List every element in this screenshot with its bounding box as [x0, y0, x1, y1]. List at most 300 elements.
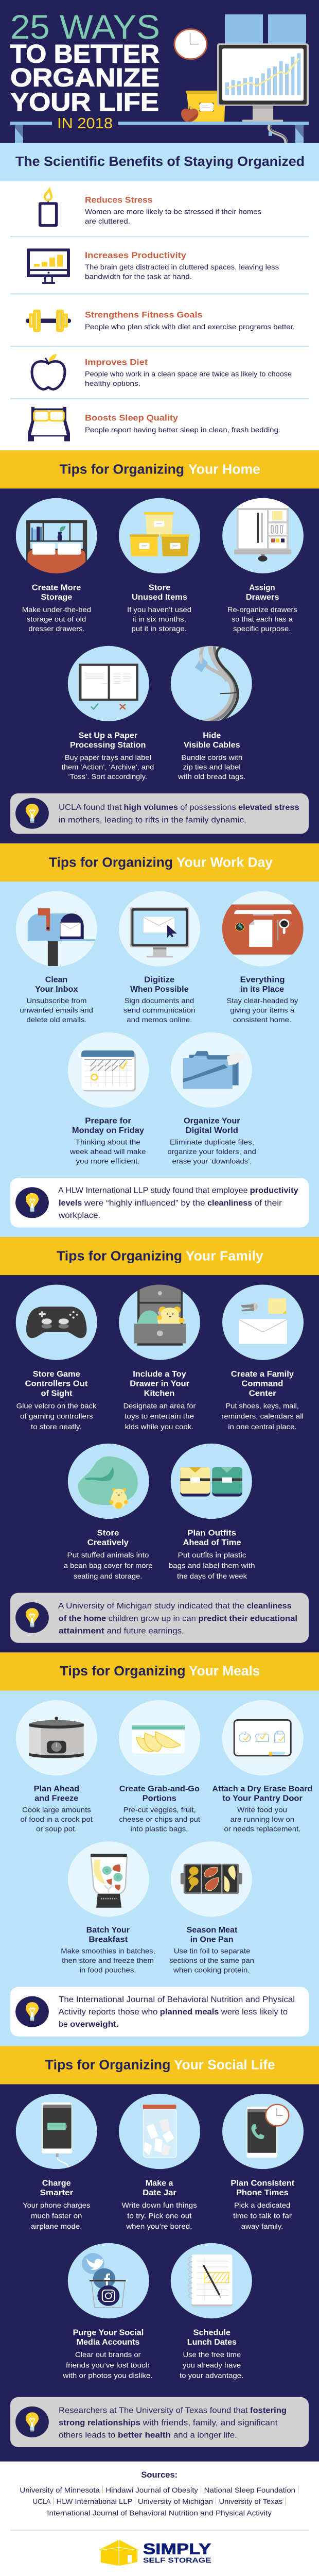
tip text: [119, 1806, 200, 1833]
tip title: Breakfast: [88, 1935, 128, 1944]
tip: charge smarter: [16, 2094, 97, 2231]
tip title: Drawers: [246, 592, 279, 602]
tip text: [167, 1139, 256, 1165]
tip text: [16, 1402, 97, 1431]
callout text: and future earnings.: [107, 1627, 184, 1635]
callout text: of possessions: [180, 804, 236, 812]
tip title: Digital World: [186, 1126, 238, 1135]
tip: batch your breakfast: [61, 1841, 155, 1975]
tip text: delete old emails.: [26, 1016, 86, 1024]
tip text: airplane mode.: [31, 2223, 82, 2231]
tip: grab-and-go portions: [119, 1700, 200, 1833]
tip text: storage out of old: [27, 616, 86, 623]
heading: Tips for Organizing Your Work Day: Your Work Day: [176, 855, 273, 870]
tip: make a date jar: [119, 2094, 200, 2231]
heading: The Scientific Benefits of Staying Organized: [0, 143, 319, 181]
tip title: Create Grab-and-Go: [119, 1784, 200, 1793]
tip title: Center: [249, 1389, 276, 1398]
tip: store creatively: [64, 1444, 153, 1581]
logo: Simply Self Storage: SELF STORAGE: [143, 2557, 211, 2565]
tip text: [169, 1552, 255, 1581]
icon: phone and clock: [222, 2094, 304, 2169]
tip text: organize your folders, and: [167, 1148, 256, 1156]
tip text: sections of the same pan: [169, 1957, 254, 1965]
tip text: erase your ‘downloads’.: [172, 1158, 252, 1165]
tip text: the days of the week: [177, 1572, 247, 1581]
tip text: [169, 1947, 254, 1975]
heading: Tips for Organizing Your Home: [0, 450, 319, 488]
tip text: [69, 1139, 146, 1165]
tip title: [86, 1925, 130, 1944]
tip title: Digitize: [144, 975, 174, 984]
tip text: Clear out brands or: [75, 2351, 141, 2359]
icon: bean bag with teddy bear: [68, 1444, 149, 1519]
benefit text: The brain gets distracted in cluttered spaces, leaving less: [85, 264, 279, 272]
tip title: Visible Cables: [184, 740, 240, 750]
tip text: and memos online.: [127, 1016, 192, 1024]
tip text: week ahead will make: [69, 1148, 146, 1156]
callout text: Researchers at The University of Texas found that: [59, 2406, 248, 2415]
benefit title: Increases Productivity: [85, 250, 186, 260]
tip title: [70, 731, 146, 750]
text block: source list: UCLA: [33, 2498, 51, 2506]
tip: create more storage: [16, 498, 97, 633]
callout text: and a longer life.: [173, 2431, 237, 2439]
benefit title: Improves Diet: [85, 357, 148, 367]
tip title: Create More: [32, 583, 81, 592]
callout text: of their: [254, 1199, 282, 1208]
tip text: [122, 2202, 197, 2231]
callout text: [58, 1187, 298, 1220]
tip text: [61, 1947, 155, 1975]
tip title: [32, 583, 81, 602]
tip text: into plastic bags.: [131, 1825, 188, 1833]
tip title: Media Accounts: [77, 2337, 139, 2347]
tip text: Eliminate duplicate files,: [170, 1139, 254, 1146]
tip title: Smarter: [40, 2189, 74, 2197]
callout text: UCLA found that: [59, 804, 122, 812]
icon: blender: [68, 1841, 149, 1917]
panel: tips for your meals: [0, 1652, 319, 2046]
benefit text: [85, 208, 261, 226]
tip: store unused items: [119, 498, 200, 633]
tip title: Command: [241, 1379, 283, 1388]
tip: schedule lunch dates: [171, 2243, 252, 2380]
tip text: seating and storage.: [74, 1572, 142, 1581]
tip title: Batch Your: [86, 1925, 130, 1935]
tip text: are running low on: [231, 1816, 294, 1824]
bar chart: [225, 53, 300, 95]
text block: source list: [20, 2486, 298, 2517]
callout: HLW International study: [10, 1178, 309, 1227]
tip text: reminders, calendars all: [221, 1413, 304, 1421]
tip: purge social media accounts: [62, 2243, 153, 2380]
tip text: Make under-the-bed: [22, 606, 91, 614]
tip title: Hide: [203, 731, 221, 740]
heading: Tips for Organizing Your Meals: Your Meals: [189, 1664, 260, 1679]
icon: bundled cables: [171, 646, 252, 724]
icon: crock pot: [16, 1700, 97, 1775]
tip title: Phone Times: [236, 2189, 289, 2197]
panel: tips for your work day: [0, 843, 319, 1237]
illustration: windows: [225, 14, 306, 44]
heading: Tips for Organizing Your Work Day: [0, 843, 319, 882]
tip title: Create a Family: [231, 1370, 294, 1379]
tip text: dresser drawers.: [28, 625, 85, 633]
tip text: consistent home.: [233, 1016, 291, 1024]
tip text: Re-organize drawers: [227, 606, 297, 614]
icon: dumbbell: [26, 310, 71, 332]
icon: light bulb: [15, 1187, 49, 1218]
subtitle: in 2018: IN 2018: [57, 115, 113, 132]
tip title: Lunch Dates: [187, 2337, 237, 2347]
callout text: The International Journal of Behavioral Nutrition and Physical: [59, 1996, 295, 2004]
tip text: [23, 2202, 90, 2231]
tip text: a bean bag cover for more: [64, 1562, 153, 1570]
tip text: when you’re bored.: [126, 2223, 192, 2231]
tip text: Pre-cut veggies, fruit,: [123, 1806, 196, 1814]
tip text: to store neatly.: [31, 1423, 82, 1431]
callout text: strong relationships: [59, 2419, 140, 2427]
callout text: high volumes: [123, 804, 178, 812]
tip title: Drawer in Your: [130, 1379, 190, 1388]
text block: source list: National Sleep Foundation: [204, 2486, 295, 2495]
chart trend line: [227, 58, 299, 88]
benefit title: Boosts Sleep Quality: [85, 413, 178, 423]
tip title: Your Inbox: [35, 985, 78, 994]
icon: game controller: [16, 1285, 97, 1360]
title: 25 Ways to Better Organize Your Life: TO BETTER: [10, 40, 160, 69]
callout text: [59, 1996, 295, 2029]
illustration: desk: [10, 122, 309, 143]
tip title: [187, 1925, 238, 1944]
tip text: then store and freeze them: [62, 1957, 154, 1965]
tip text: Bundle cords with: [181, 754, 242, 762]
tip text: Use tin foil to separate: [174, 1947, 250, 1956]
icon: social media icons in trash can: [68, 2243, 149, 2318]
tip: hide visible cables: [171, 646, 252, 781]
icon: jar of paper slips: [119, 2094, 200, 2169]
heading: Tips for Organizing Your Meals: [0, 1652, 319, 1690]
text block: source list: University of Michigan: [138, 2498, 213, 2506]
text block: source list: University of Texas: [219, 2498, 282, 2506]
tip title: [119, 1784, 200, 1803]
tip: plan consistent phone times: [222, 2094, 304, 2231]
callout text: productivity: [250, 1187, 298, 1195]
tip title: Make a: [146, 2179, 173, 2188]
callout text: overweight.: [70, 2021, 119, 2029]
icon: notebook with pen: [171, 2243, 252, 2318]
tip title: to Your Pantry Door: [222, 1794, 303, 1803]
tip text: [224, 1806, 300, 1833]
icon: monitor with bars: [27, 248, 70, 284]
callout text: others leads to: [59, 2431, 115, 2439]
tip text: unwanted emails and: [20, 1007, 93, 1015]
tip title: Kitchen: [144, 1389, 174, 1398]
tip: dry erase board on pantry door: [212, 1700, 312, 1833]
tip title: [187, 2328, 237, 2347]
tip title: When Possible: [130, 985, 189, 994]
tip text: when cooking protein.: [173, 1967, 250, 1975]
tip text: of food in a crock pot: [21, 1816, 93, 1824]
tip title: [130, 1370, 190, 1398]
tip title: [231, 2179, 295, 2197]
callout text: A University of Michigan study indicated that the: [58, 1602, 244, 1611]
tip title: Date Jar: [143, 2189, 176, 2197]
tip text: [62, 2351, 153, 2380]
benefit: increases productivity: [27, 248, 279, 284]
tip title: Creatively: [87, 1538, 129, 1547]
panel: tips for your social life: [0, 2046, 319, 2462]
tip title: Clean: [45, 975, 67, 984]
tip title: [34, 1784, 79, 1803]
tip title: Organize Your: [184, 1116, 240, 1125]
tip title: Portions: [143, 1794, 176, 1803]
tip text: Thinking about the: [76, 1139, 140, 1146]
tip title: and Freeze: [34, 1794, 78, 1803]
tip text: [127, 606, 191, 633]
icon: keys, note and envelope: [222, 1285, 304, 1360]
heading: Tips for Organizing Your Social Life: Your Social Life: [174, 2058, 275, 2072]
tip: organize your digital world: [167, 1032, 256, 1165]
tip text: bags and label them with: [169, 1562, 255, 1570]
icon: paper trays: [68, 646, 149, 721]
tip text: [62, 754, 154, 781]
tip text: or needs replacement.: [224, 1825, 300, 1833]
tip text: to your advantage.: [180, 2372, 243, 2380]
callout: UCLA study: [10, 793, 309, 834]
benefit text: healthy options.: [85, 380, 140, 388]
tip title: Include a Toy: [133, 1370, 187, 1379]
tip: everything in its place: [222, 891, 304, 1024]
tip title: Charge: [42, 2179, 71, 2188]
callout text: workplace.: [58, 1211, 100, 1220]
panel: tips for your family: [0, 1237, 319, 1652]
tip text: Cook large amounts: [22, 1806, 91, 1814]
tip: store game controllers: [16, 1285, 97, 1431]
icon: candle: [40, 187, 57, 226]
tip title: Controllers Out: [25, 1379, 88, 1388]
icon: apple outline: [32, 354, 65, 389]
callout text: fostering: [250, 2406, 287, 2415]
text block: source list: International Journal of Behavioral Nutrition and Physical Activity: [47, 2510, 272, 2517]
icon: dry erase board: [222, 1700, 304, 1775]
tip: plan outfits ahead of time: [169, 1444, 255, 1581]
text block: source list: University of Minnesota: [20, 2486, 100, 2495]
callout text: A HLW International LLP study found that employee: [58, 1187, 248, 1195]
tip: digitize when possible: [119, 891, 200, 1024]
tip title: Prepare for: [85, 1116, 132, 1125]
tip text: to try. Pick one out: [127, 2212, 192, 2220]
tip text: Pick a dedicated: [234, 2202, 290, 2210]
illustration: desktop monitor with chart: [217, 43, 309, 122]
text block: source list: Hindawi Journal of Obesity: [105, 2486, 199, 2495]
callout text: elevated stress: [238, 804, 299, 812]
tip text: Buy paper trays and label: [65, 754, 151, 762]
tip text: specific purpose.: [233, 625, 291, 633]
callout text: [59, 2406, 287, 2439]
tip text: Put shoes, keys, mail,: [226, 1402, 299, 1410]
benefit text: People report having better sleep in clean, fresh bedding.: [85, 426, 280, 434]
tip title: Purge Your Social: [73, 2328, 144, 2337]
benefit text: are cluttered.: [85, 218, 130, 226]
tip text: Use the free time: [183, 2351, 241, 2359]
icon: plastic bag of lemon slices: [119, 1700, 200, 1775]
benefit: strengthens fitness goals: [26, 310, 295, 332]
tip text: If you haven’t used: [127, 606, 191, 614]
benefit text: People who work in a clean space are twice as likely to choose: [85, 370, 292, 378]
icon: drawer with toys: [119, 1285, 200, 1360]
icon: tidy desk top: [222, 891, 304, 967]
icon: light bulb: [15, 1996, 49, 2027]
heading: sources: Sources:: [141, 2470, 178, 2480]
tip title: [183, 1529, 241, 1547]
benefit text: People who plan stick with diet and exercise programs better.: [85, 323, 295, 331]
tip text: Put stuffed animals into: [67, 1552, 149, 1560]
tip text: in one central place.: [228, 1423, 296, 1431]
icon: phone on charger: [16, 2094, 97, 2169]
icon: mailbox: [16, 891, 97, 967]
tip text: giving your items a: [230, 1007, 295, 1015]
tip text: [22, 606, 91, 633]
title: 25 Ways to Better Organize Your Life: [10, 8, 160, 116]
tip text: ‘Toss’. Sort accordingly.: [68, 773, 147, 781]
icon: light bulb: [15, 2406, 49, 2437]
tip title: [25, 1370, 88, 1398]
heading: Tips for Organizing Your Home: Your Home: [188, 462, 260, 477]
icon: bagged outfits: [171, 1444, 252, 1519]
heading: Tips for Organizing Your Home: Tips for Organizing: [60, 462, 184, 477]
tip title: Unused Items: [132, 592, 187, 602]
callout text: of the home: [59, 1615, 106, 1623]
logo: Simply Self Storage: [98, 2540, 211, 2566]
heading: Tips for Organizing Your Social Life: Tips for Organizing: [45, 2058, 170, 2072]
tip title: Monday on Friday: [72, 1126, 145, 1135]
heading: Tips for Organizing Your Work Day: Tips for Organizing: [49, 855, 173, 870]
tip: plan ahead and freeze: [16, 1700, 97, 1833]
title: 25 Ways to Better Organize Your Life: 25 WAYS: [10, 8, 160, 46]
tip text: put it in storage.: [131, 625, 187, 633]
panel: hero header: [0, 0, 319, 143]
tip title: [73, 2328, 144, 2347]
tip title: in One Pan: [190, 1935, 234, 1944]
tip: family command center: [221, 1285, 304, 1431]
callout text: planned meals: [160, 2008, 219, 2016]
tip title: Store: [97, 1529, 119, 1537]
callout: Journal of Behavioral Nutrition study: [10, 1987, 309, 2037]
tip text: [226, 997, 298, 1024]
tip title: Everything: [240, 975, 285, 984]
icon: wall clock: [174, 29, 207, 59]
tip: prepare for monday on friday: [68, 1032, 149, 1165]
tip title: [35, 975, 78, 994]
tip text: zip ties and label: [183, 764, 241, 771]
tip title: Ahead of Time: [183, 1538, 241, 1547]
heading: Tips for Organizing Your Social Life: [0, 2046, 319, 2084]
benefit text: [85, 264, 279, 281]
callout text: with friends, family, and significant: [143, 2419, 278, 2427]
tip text: of gaming controllers: [20, 1413, 93, 1421]
callout text: cleanliness: [207, 1199, 252, 1208]
benefit text: bandwidth for the task at hand.: [85, 273, 192, 281]
callout text: levels: [59, 1199, 82, 1208]
tip title: [40, 2179, 74, 2197]
callout text: were “highly influenced” by the: [84, 1199, 205, 1208]
tip title: Processing Station: [70, 740, 146, 750]
tip title: Store Game: [33, 1370, 80, 1379]
icon: light bulb: [15, 798, 49, 829]
tip text: Designate an area for: [123, 1402, 196, 1410]
tip: season meat in one pan: [169, 1841, 254, 1975]
icon: bed with shelves: [16, 498, 97, 573]
tip text: in food pouches.: [80, 1967, 136, 1975]
tip title: [143, 2179, 176, 2197]
tip title: Plan Outfits: [187, 1529, 236, 1537]
icon: monitor with email: [119, 891, 200, 967]
callout: University of Texas research: [10, 2397, 309, 2447]
tip text: Unsubscribe from: [26, 997, 86, 1005]
title: 25 Ways to Better Organize Your Life: ORGANIZE: [10, 63, 160, 92]
tip text: [221, 1402, 304, 1431]
tip text: it in six months,: [132, 616, 186, 623]
tip text: [227, 606, 297, 633]
callout text: predict their educational: [199, 1615, 297, 1623]
callout text: [58, 1602, 297, 1635]
tip title: Set Up a Paper: [79, 731, 138, 740]
benefit text: Women are more likely to be stressed if their homes: [85, 208, 261, 216]
callout text: in mothers, leading to rifts in the family dynamic.: [59, 816, 246, 824]
callout text: [59, 804, 299, 824]
tip text: Stay clear-headed by: [226, 997, 298, 1005]
tip text: kids while you cook.: [125, 1423, 193, 1431]
icon: calendar: [68, 1032, 149, 1108]
tip text: Make smoothies in batches,: [61, 1947, 155, 1956]
tip text: [180, 2351, 243, 2380]
tip title: Season Meat: [187, 1925, 238, 1935]
tip title: Attach a Dry Erase Board: [212, 1784, 312, 1793]
tip text: them ‘Action’, ‘Archive’, and: [62, 764, 154, 771]
tip text: [123, 997, 196, 1024]
tip text: with or photos you dislike.: [62, 2372, 153, 2380]
tip title: Assign: [249, 583, 275, 592]
icon: stacked storage boxes: [119, 498, 200, 573]
tip title: Plan Ahead: [34, 1784, 79, 1793]
tip text: send communication: [123, 1007, 196, 1015]
tip text: Sign documents and: [125, 997, 194, 1005]
logo: Simply Self Storage: SIMPLY: [143, 2540, 211, 2557]
tip text: Put outfits in plastic: [178, 1552, 246, 1560]
tip text: you already have: [183, 2362, 241, 2369]
illustration: yellow storage box: [186, 91, 225, 122]
tip: toy drawer in kitchen: [119, 1285, 200, 1431]
tip title: [246, 583, 279, 602]
tip text: time to talk to far: [233, 2212, 292, 2220]
text block: source list: HLW International LLP: [57, 2498, 132, 2506]
heading: Tips for Organizing Your Family: [0, 1237, 319, 1275]
panel: tips for your home: [0, 450, 319, 843]
icon: sheet pan with food: [171, 1841, 252, 1917]
tip text: Glue velcro on the back: [16, 1402, 97, 1410]
heading: Tips for Organizing Your Family: Your Family: [186, 1248, 263, 1263]
tip title: Schedule: [193, 2328, 231, 2337]
title: 25 Ways to Better Organize Your Life: YOUR LIFE: [10, 88, 159, 116]
icon: apple: [181, 106, 199, 122]
benefit title: Strengthens Fitness Goals: [85, 310, 202, 320]
callout text: attainment: [59, 1627, 105, 1635]
tip text: cheese or chips and put: [119, 1816, 200, 1824]
tip text: away family.: [241, 2223, 283, 2231]
callout text: children grow up in can: [109, 1615, 196, 1623]
